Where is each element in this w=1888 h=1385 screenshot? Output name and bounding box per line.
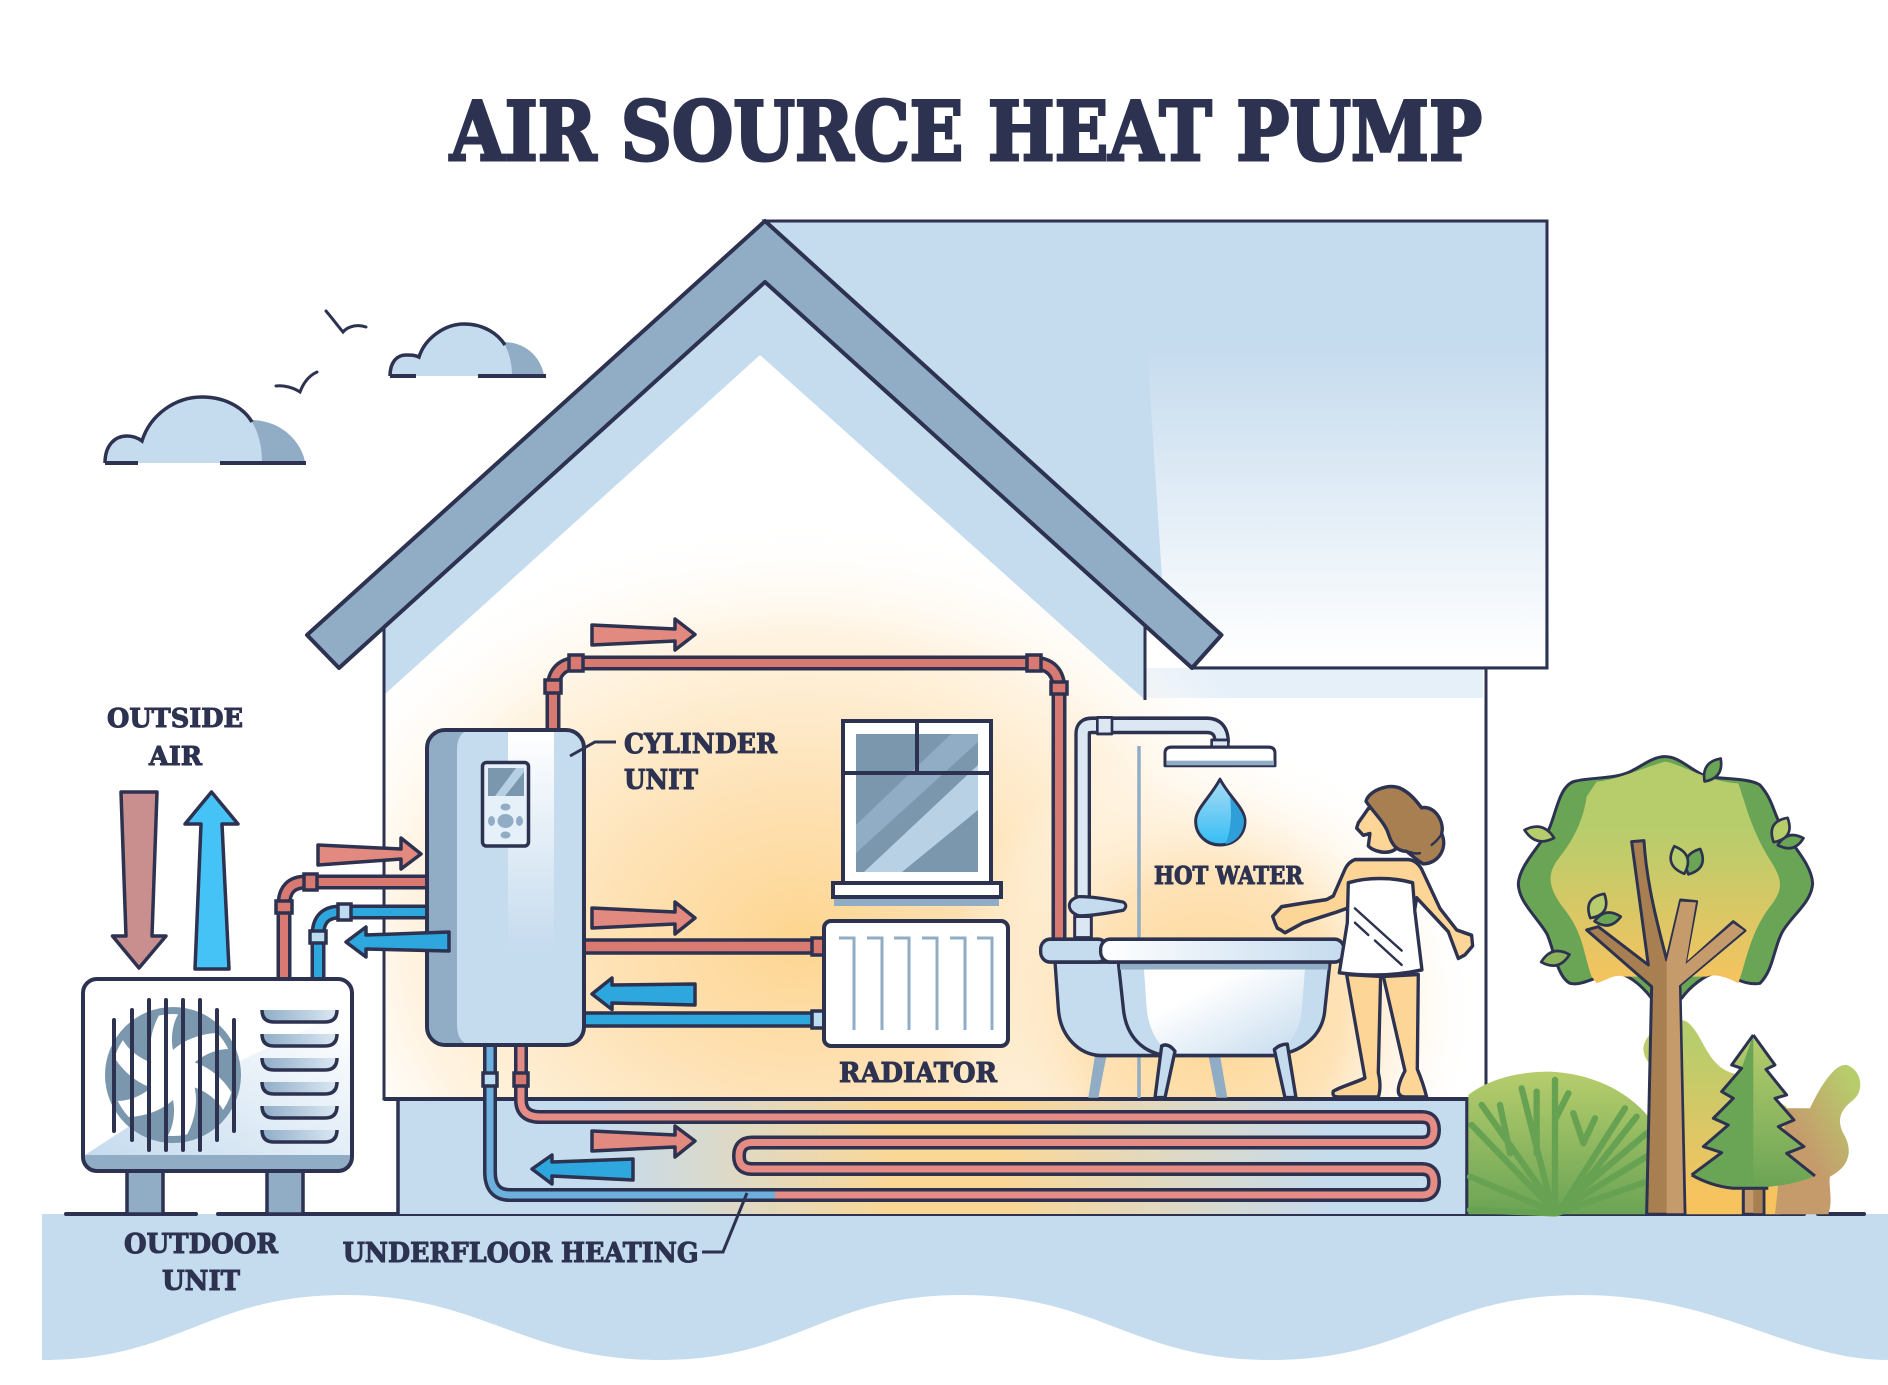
back legs [1088, 1055, 1227, 1098]
back tub [1055, 962, 1173, 1056]
label: cylinder unit: CYLINDER [624, 729, 778, 760]
bush: yellow backdrop [1643, 1020, 1787, 1214]
towel folds [1355, 908, 1402, 965]
foundation with underfloor heating [384, 1099, 1486, 1214]
canopy highlight [1551, 762, 1780, 983]
unit legs [127, 1170, 303, 1214]
label: cylinder unit: UNIT [624, 765, 698, 796]
hair strands [1410, 834, 1442, 854]
bathtub [1041, 939, 1344, 1098]
arrow: top pipe flow [592, 619, 695, 650]
cloud: small [390, 324, 546, 376]
arrow: radiator return [592, 978, 695, 1010]
front tub [1118, 962, 1330, 1056]
roof: side [765, 221, 1547, 668]
legs [1333, 975, 1427, 1097]
outdoor unit [83, 979, 352, 1214]
heat glow [386, 579, 1434, 1097]
soffit [384, 282, 1145, 700]
shower [1069, 717, 1275, 938]
leaves [1523, 755, 1805, 969]
roof: front gable [307, 221, 1222, 668]
label: outdoor unit: OUTDOOR [124, 1229, 279, 1260]
louvres [262, 1010, 337, 1142]
label: outdoor unit [124, 1229, 279, 1297]
label: hot water: HOT WATER [1154, 861, 1304, 890]
front legs [1155, 1045, 1175, 1098]
arms and shoulders [1273, 860, 1473, 958]
fan grille [114, 1000, 234, 1150]
arrow: heat to cylinder [318, 838, 421, 869]
cylinder unit [427, 730, 584, 1045]
ground [42, 1214, 1888, 1360]
face [1357, 805, 1407, 852]
arrow: radiator flow [592, 902, 695, 934]
water drop [1196, 779, 1245, 845]
arrow: warm air in [112, 792, 166, 968]
pine tree [1692, 1035, 1815, 1214]
fan [96, 1004, 250, 1146]
bathroom partition [1137, 746, 1141, 1098]
birds [276, 311, 366, 392]
top heating pipe [545, 655, 1067, 945]
label: outside air: AIR [148, 742, 202, 772]
label: cylinder unit [570, 729, 778, 796]
canopy [1518, 757, 1813, 998]
arrow: cold air out [185, 792, 238, 969]
window [833, 721, 1001, 906]
towel [1339, 878, 1422, 975]
label: outdoor unit: UNIT [162, 1266, 240, 1297]
label: underfloor heating: UNDERFLOOR HEATING [343, 1238, 699, 1269]
trunk highlight [1667, 902, 1744, 1213]
tree [1518, 755, 1813, 1214]
unit casing [83, 979, 352, 1171]
trunk [1587, 841, 1745, 1214]
hair [1366, 787, 1444, 864]
person in towel [1273, 787, 1473, 1097]
control panel [482, 762, 528, 846]
radiator pipes [580, 938, 825, 1028]
label: radiator: RADIATOR [839, 1058, 998, 1089]
cloud: large [105, 397, 306, 463]
radiator [824, 921, 1008, 1046]
house interior wall [384, 620, 1486, 1100]
bush: brown [1775, 1065, 1860, 1214]
label: outside air [107, 704, 243, 772]
arrow: return to outdoor unit [346, 927, 449, 957]
arrow: underfloor flow [592, 1126, 695, 1157]
underfloor pipes [483, 1045, 1434, 1195]
outdoor pipes [276, 874, 428, 980]
title: AIR SOURCE HEAT PUMP [449, 85, 1482, 180]
label: outside air: OUTSIDE [107, 704, 243, 734]
house walls [384, 625, 1486, 1099]
label: underfloor heating [343, 1193, 747, 1269]
arrow: underfloor return [532, 1155, 633, 1184]
bush: green [1468, 1072, 1648, 1214]
